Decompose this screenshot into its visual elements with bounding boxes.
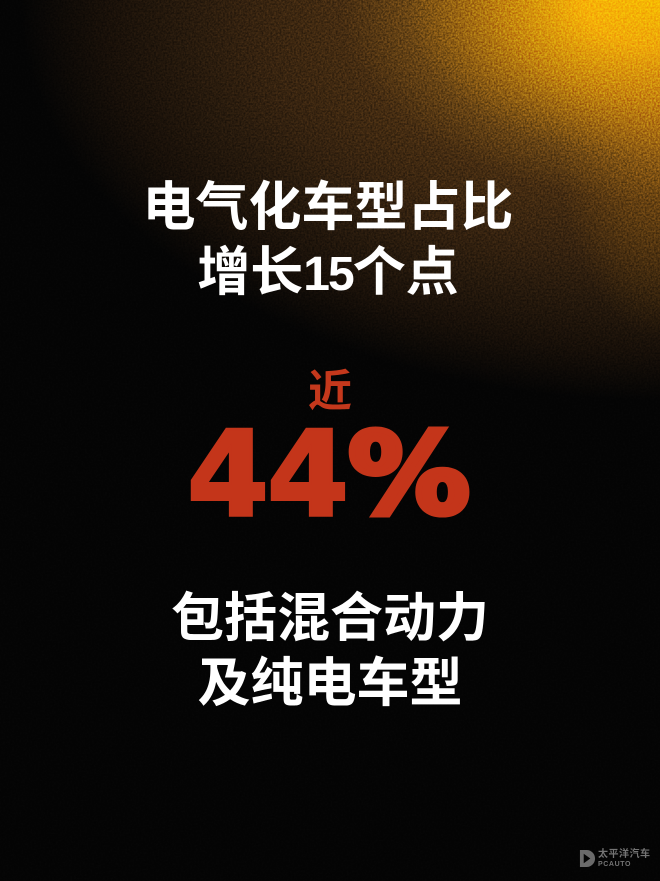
subheading line 2: 及纯电车型	[198, 654, 462, 713]
heading line 1: 电气化车型占比	[142, 178, 514, 237]
subheading line 1: 包括混合动力	[171, 589, 489, 648]
logo: PCAUTO	[580, 848, 650, 868]
logo mark	[580, 850, 595, 867]
logo name: 太平洋汽车	[598, 849, 650, 860]
heading line 2: 增长15个点	[197, 243, 459, 302]
subheading	[171, 589, 489, 713]
big number 44%	[187, 410, 470, 530]
heading	[142, 178, 514, 302]
label: near: 近	[308, 367, 352, 416]
logo latin: PCAUTO	[598, 861, 631, 868]
